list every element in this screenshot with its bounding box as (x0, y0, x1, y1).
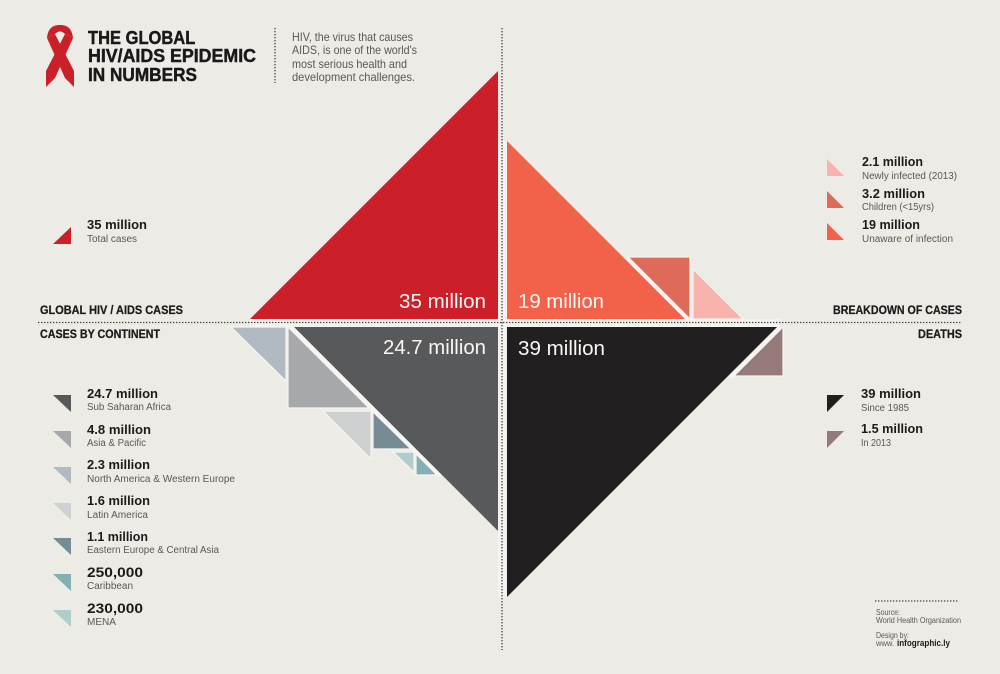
legend: breakdown of cases (827, 154, 957, 245)
legend: cases by continent: 2.3 million (87, 457, 150, 472)
legend: breakdown of cases: Children (<15yrs) (862, 202, 934, 213)
legend: total cases (53, 217, 147, 245)
intro text: AIDS, is one of the world's (292, 43, 417, 57)
legend: cases by continent: 1.6 million (87, 493, 150, 508)
legend: cases by continent: Sub Saharan Africa (87, 402, 171, 413)
legend: breakdown of cases: 2.1 million (862, 154, 923, 169)
legend: cases by continent: 24.7 million (87, 386, 158, 401)
legend: cases by continent: Caribbean (87, 581, 133, 592)
heading: global HIV/AIDS cases: GLOBAL HIV / AIDS CASES (40, 305, 183, 317)
intro text: development challenges. (292, 70, 415, 84)
legend: breakdown of cases: Newly infected (2013) (862, 171, 957, 182)
panel: deaths triangles (507, 327, 783, 597)
title: HIV/AIDS EPIDEMIC (88, 46, 256, 66)
legend: cases by continent: 230,000 (87, 600, 143, 616)
legend: breakdown of cases: 19 million (862, 217, 920, 232)
legend: deaths: 39 million (861, 386, 921, 401)
footer: source and credit: www. (875, 639, 894, 648)
intro text: most serious health and (292, 57, 407, 71)
legend: cases by continent: North America & Western Europe (87, 474, 235, 485)
footer: source and credit: Design by: (876, 631, 909, 640)
legend: breakdown of cases: Unaware of infection (862, 234, 953, 245)
heading: cases by continent: CASES BY CONTINENT (40, 329, 160, 341)
panel: breakdown of cases triangles (507, 141, 743, 319)
panel: cases by continent triangles (231, 327, 498, 531)
legend: cases by continent: Asia & Pacific (87, 438, 146, 449)
legend: cases by continent: Eastern Europe & Central Asia (87, 545, 219, 556)
icon: red ribbon (46, 25, 74, 87)
footer: source and credit (875, 601, 961, 648)
legend: cases by continent: 1.1 million (87, 529, 148, 544)
legend: cases by continent: MENA (87, 617, 116, 628)
legend: cases by continent: 4.8 million (87, 422, 151, 437)
legend: total cases: Total cases (87, 234, 137, 245)
value: 24.7 million: 24.7 million (383, 337, 486, 359)
legend: deaths: 1.5 million (861, 421, 923, 436)
footer: source and credit: World Health Organization (876, 616, 961, 625)
legend: deaths (827, 386, 923, 449)
footer: source and credit: Source: (876, 608, 900, 617)
value: 35 million: 35 million (399, 291, 486, 313)
legend: total cases: 35 million (87, 217, 147, 232)
legend: cases by continent (53, 386, 235, 628)
legend: cases by continent: 250,000 (87, 564, 143, 580)
value: 39 million: 39 million (518, 338, 605, 360)
panel: global cases triangle (250, 71, 498, 319)
legend: cases by continent: Latin America (87, 510, 148, 521)
title: THE GLOBAL (88, 28, 195, 48)
legend: deaths: Since 1985 (861, 403, 909, 414)
heading: deaths: DEATHS (918, 329, 962, 341)
heading: breakdown of cases: BREAKDOWN OF CASES (833, 305, 962, 317)
title: IN NUMBERS (88, 65, 197, 85)
footer: source and credit: infographic.ly (897, 638, 950, 648)
header (46, 25, 420, 87)
legend: deaths: In 2013 (861, 438, 891, 449)
value: 19 million: 19 million (518, 291, 604, 313)
legend: breakdown of cases: 3.2 million (862, 186, 925, 201)
intro text: HIV, the virus that causes (292, 30, 413, 44)
